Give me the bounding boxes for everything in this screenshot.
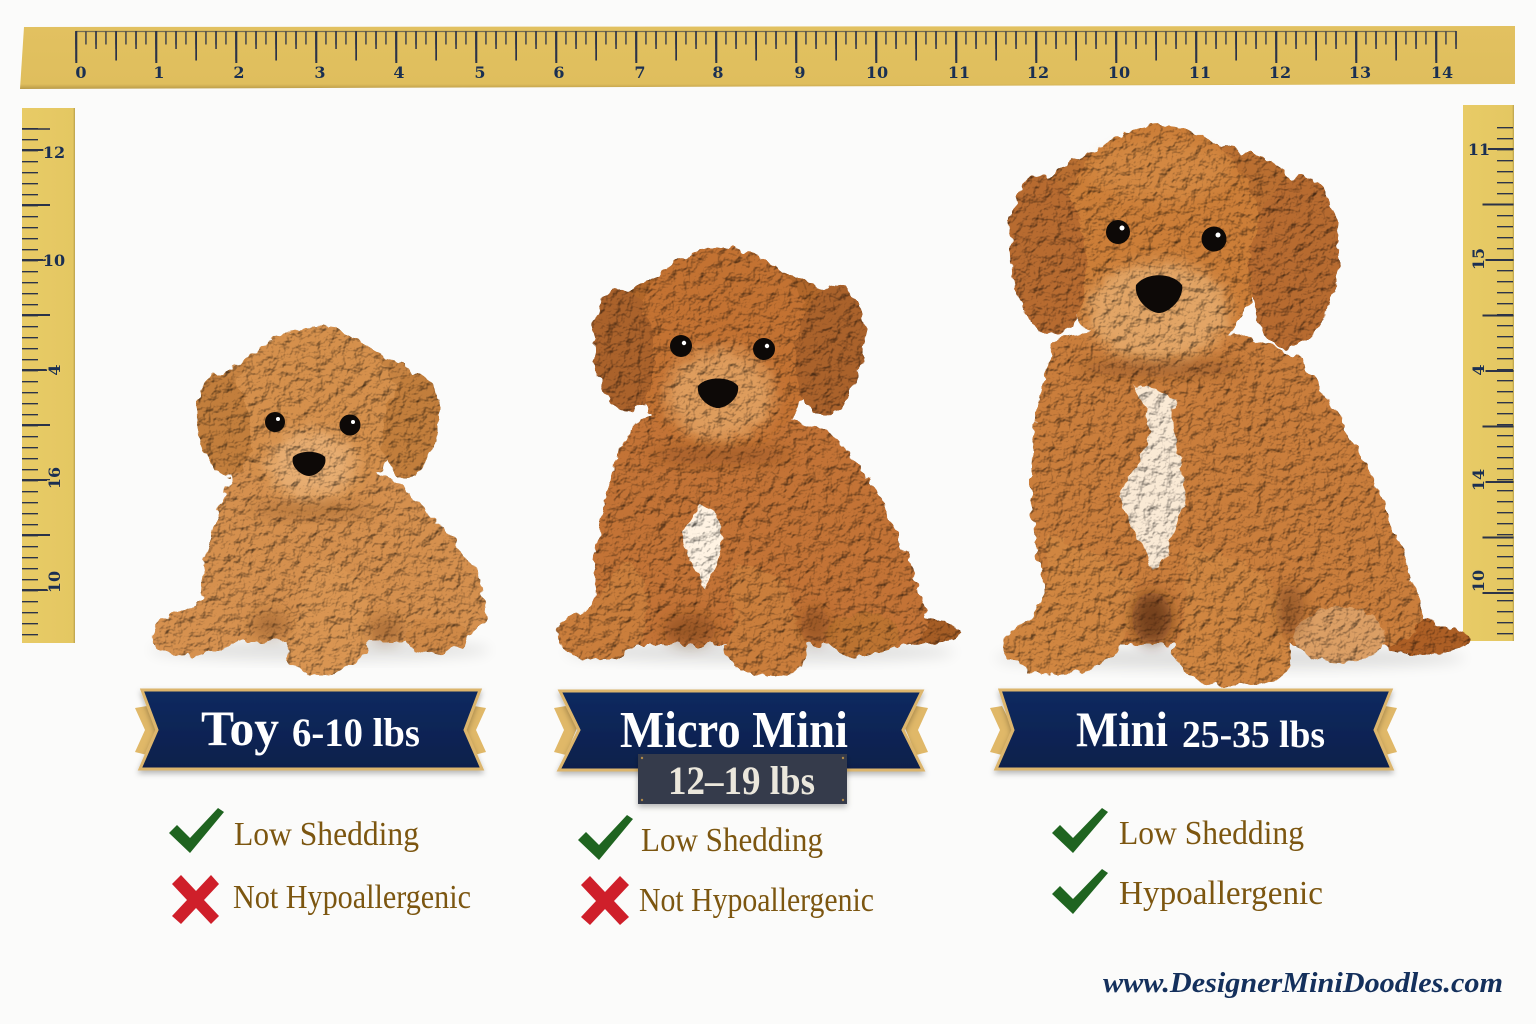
right ruler: 15 [1469, 248, 1488, 270]
weight plaque [638, 754, 847, 804]
ruler numbers: 11 [948, 63, 970, 82]
icon: cross [581, 876, 629, 925]
title: Toy [201, 700, 279, 756]
icon: check [1052, 808, 1108, 853]
eyes and nose [1106, 220, 1226, 313]
not hypoallergenic label: Not Hypoallergenic [233, 879, 471, 916]
puppy: mini [995, 125, 1472, 686]
ruler numbers: 14 [1431, 63, 1453, 82]
fur shading [1075, 359, 1304, 644]
icon: cross [172, 875, 219, 924]
icon: check [169, 808, 224, 853]
banner: toy [135, 690, 486, 769]
ruler numbers: 10 [866, 63, 888, 82]
weight: 6-10 lbs [292, 710, 420, 755]
ruler numbers: 9 [794, 63, 806, 82]
left ruler: 10 [45, 571, 64, 593]
eyes and nose [670, 335, 775, 408]
low shedding label: Low Shedding [1119, 815, 1304, 852]
features: micro mini [578, 815, 874, 925]
ruler numbers: 6 [553, 63, 565, 82]
title: Mini [1076, 701, 1168, 757]
icon: check [1052, 869, 1108, 914]
title: Micro Mini [620, 702, 848, 759]
website url: www.DesignerMiniDoodles.com [1103, 967, 1503, 999]
right ruler [1463, 105, 1514, 641]
ruler numbers: 10 [1108, 63, 1130, 82]
ruler numbers: 1 [153, 63, 165, 82]
ruler numbers: 4 [393, 63, 405, 82]
ruler numbers: 12 [1027, 63, 1049, 82]
eyes and nose [265, 412, 360, 476]
ruler numbers: 8 [712, 63, 724, 82]
ruler numbers: 0 [75, 63, 87, 82]
banner: mini [990, 690, 1397, 769]
hypoallergenic label: Hypoallergenic [1119, 875, 1323, 912]
fur shading [250, 502, 403, 644]
weight plaque: 12–19 lbs [668, 758, 815, 803]
weight: 25-35 lbs [1182, 714, 1325, 756]
low shedding label: Low Shedding [234, 816, 419, 853]
right ruler: 4 [1469, 364, 1488, 376]
puppy: micro mini [558, 248, 960, 677]
features: mini [1052, 808, 1323, 914]
fur shading [648, 446, 829, 646]
ruler numbers: 11 [1189, 63, 1211, 82]
top ruler [20, 26, 1515, 89]
ruler numbers: 12 [1269, 63, 1291, 82]
ruler numbers: 13 [1349, 63, 1371, 82]
right ruler: 10 [1469, 570, 1488, 592]
icon: check [578, 815, 633, 860]
left ruler: 4 [45, 364, 64, 376]
low shedding label: Low Shedding [641, 822, 823, 859]
ruler numbers: 7 [634, 63, 646, 82]
left ruler [22, 108, 75, 643]
left ruler: 12 [43, 143, 65, 162]
puppy: toy [150, 327, 490, 674]
banner: micro mini [554, 691, 928, 804]
right ruler: 14 [1469, 469, 1488, 491]
features: toy [169, 808, 471, 924]
ruler numbers: 2 [233, 63, 245, 82]
ruler numbers [75, 63, 1453, 82]
right ruler: 11 [1468, 140, 1490, 159]
not hypoallergenic label: Not Hypoallergenic [639, 882, 874, 919]
left ruler: 16 [45, 467, 64, 489]
ruler numbers: 5 [474, 63, 486, 82]
left ruler: 10 [43, 251, 65, 270]
ruler numbers: 3 [314, 63, 326, 82]
